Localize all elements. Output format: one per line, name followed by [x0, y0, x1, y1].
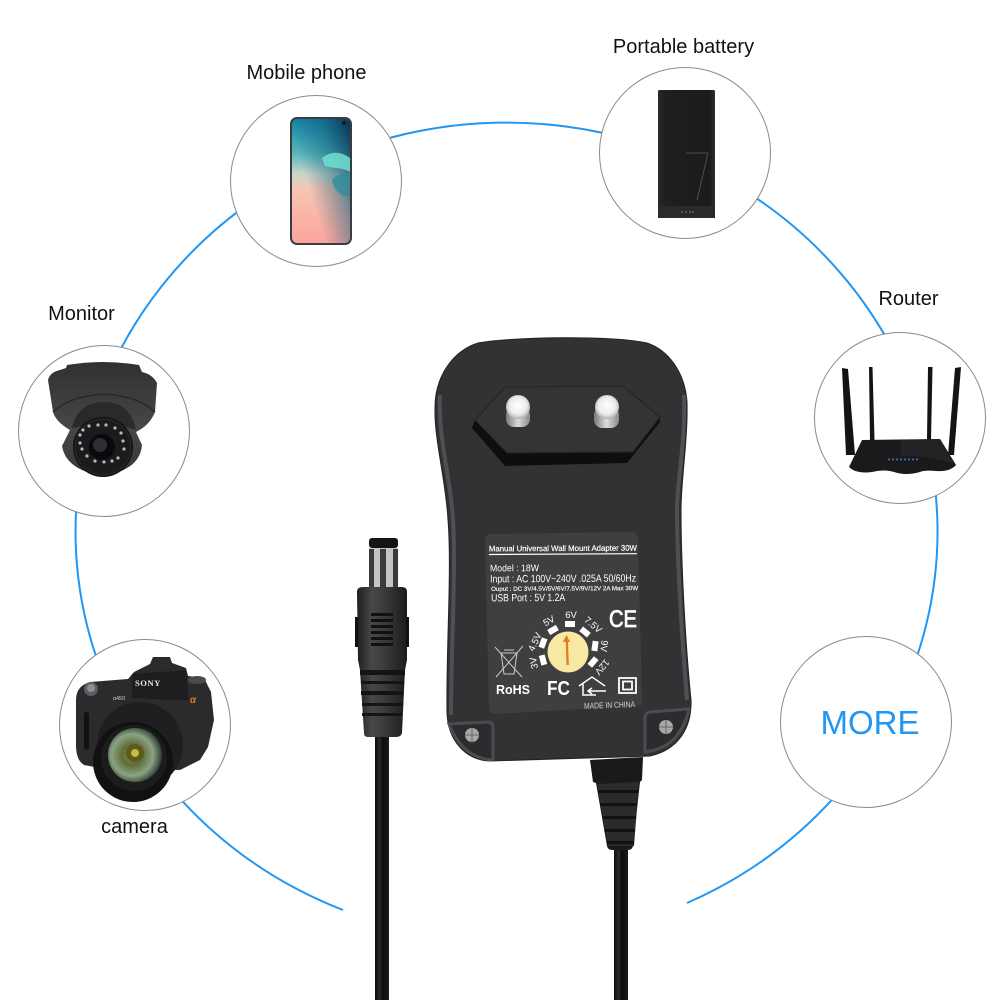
- label text: Ouput : DC 3V/4.5V/5V/6V/7.5V/9V/12V 2A Max 30W: [491, 586, 638, 593]
- icon: dslr camera: α: [190, 695, 197, 706]
- dc plug and cable: [355, 538, 409, 1000]
- side bevel left: [440, 395, 454, 715]
- icon: weee bin: [495, 646, 523, 677]
- label text: USB Port : 5V 1.2A: [491, 592, 565, 604]
- panel: more: [780, 636, 952, 808]
- icon: power bank: [658, 90, 715, 218]
- rotary dial: 4.5V: [526, 630, 545, 653]
- heading: Portable battery: Portable battery: [613, 36, 754, 58]
- rotary dial: 12V: [592, 657, 611, 677]
- heading: Mobile phone: Mobile phone: [246, 62, 367, 84]
- rotary dial: 9V: [597, 640, 609, 653]
- label text: Model : 18W: [490, 563, 539, 574]
- rotary dial: 6V: [565, 610, 577, 621]
- made in china: MADE IN CHINA: [584, 699, 635, 711]
- adapter cable: [590, 757, 643, 1000]
- icon: dome camera: [48, 362, 157, 477]
- label text: Input : AC 100V~240V .025A 50/60Hz: [490, 573, 636, 585]
- connecting ring: [76, 123, 938, 910]
- icon: double square: [619, 678, 636, 693]
- lens: [97, 702, 183, 788]
- label panel: [485, 532, 642, 714]
- icon: dslr camera: α450: [113, 696, 125, 702]
- rotary dial: [526, 610, 611, 677]
- rotary dial: 5V: [541, 613, 558, 629]
- icon: smartphone: [290, 117, 352, 245]
- pin left: [506, 395, 530, 427]
- side bevel right: [677, 395, 687, 700]
- panel: camera: [60, 640, 230, 838]
- panel: router: [814, 288, 986, 504]
- heading: MORE: MORE: [820, 704, 920, 741]
- FC mark: FC: [547, 678, 570, 700]
- RoHS mark: RoHS: [496, 683, 530, 697]
- heading: Router: Router: [878, 288, 939, 310]
- label text: [489, 544, 639, 604]
- CE mark: CE: [609, 606, 637, 633]
- icon: dslr camera: [76, 657, 214, 802]
- corner foot right: [645, 709, 689, 752]
- rotary dial: 7.5V: [582, 615, 604, 636]
- icon: home: [579, 677, 606, 695]
- icon: wifi router: [842, 367, 961, 474]
- pin right: [594, 395, 619, 428]
- heading: Monitor: Monitor: [48, 303, 115, 325]
- panel: portable battery: [600, 36, 770, 238]
- label text: Manual Universal Wall Mount Adapter 30W: [489, 544, 637, 553]
- heading: camera: camera: [101, 816, 169, 838]
- rotary dial: 3V: [528, 656, 541, 670]
- icon: dslr camera: SONY: [135, 678, 161, 688]
- plug recess: [472, 386, 660, 466]
- adapter body: [435, 338, 691, 761]
- corner foot left: [449, 722, 493, 760]
- panel: mobile phone: [230, 62, 402, 266]
- panel: monitor: [18, 303, 190, 516]
